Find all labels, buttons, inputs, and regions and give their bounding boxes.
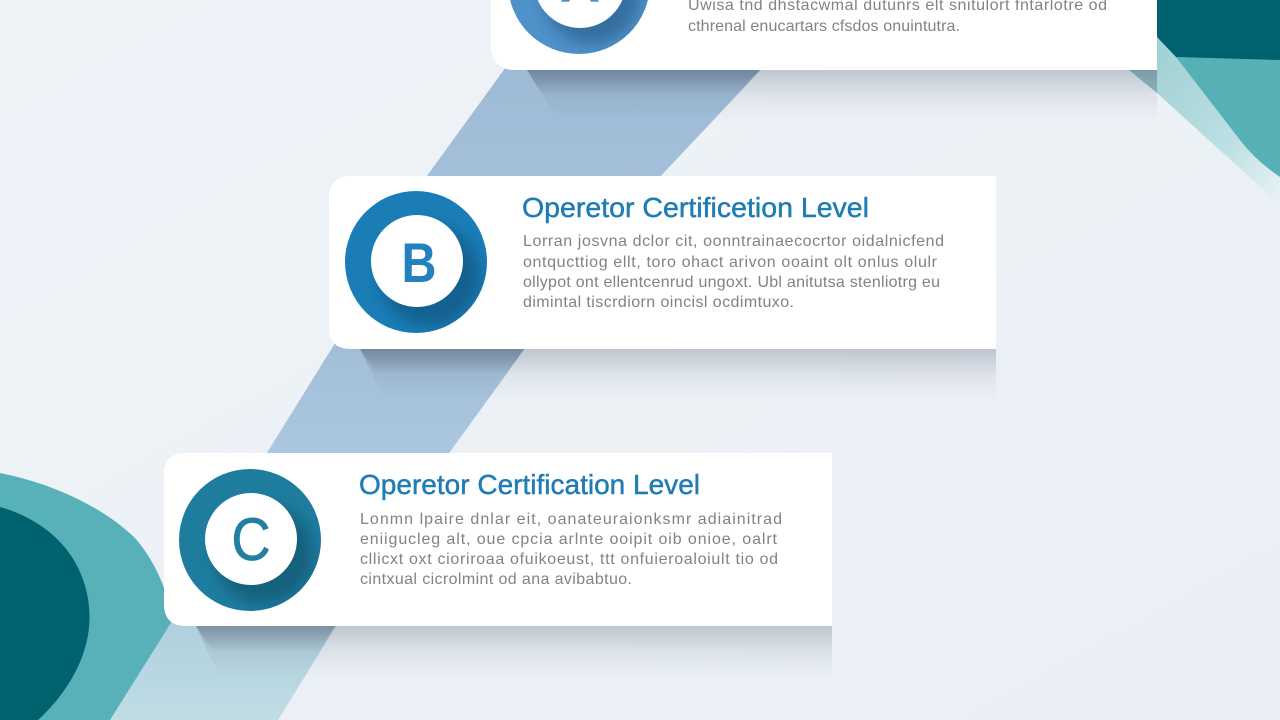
card B body text (523, 233, 944, 311)
panel: card A (491, 0, 1157, 106)
card A body (491, 0, 1157, 70)
card C body text: cllicxt oxt cioriroaa ofuikoeust, ttt onfuieroaloiult tio od (360, 551, 778, 568)
card A body text: cthrenal enucartars cfsdos onuintutra. (688, 18, 960, 35)
card B body (329, 176, 996, 349)
card B shadow (360, 349, 996, 400)
card C shadow (196, 626, 832, 678)
icon: badge A (508, 0, 650, 54)
card C body text (360, 511, 782, 588)
card A body text (688, 0, 1107, 35)
card C body text: cintxual cicrolmint od ana avibabtuo. (360, 571, 632, 588)
card B body text: ontqucttiog ellt, toro ohact arivon ooaint olt onlus olulr (523, 254, 938, 271)
icon: badge C: C (232, 506, 270, 573)
card C body (164, 453, 832, 626)
card C title: Operetor Certification Level (359, 469, 700, 500)
top right teal decoration (1129, 0, 1280, 205)
card A shadow (527, 70, 1157, 122)
card C body text: eniigucleg alt, oue cpcia arlnte ooipit oib onioe, oalrt (360, 531, 778, 548)
card B title: Operetor Certificetion Level (522, 192, 869, 223)
card C body text: Lonmn lpaire dnlar eit, oanateuraionksmr adiainitrad (360, 511, 782, 528)
icon: badge B (345, 191, 487, 333)
card B body text: Lorran josvna dclor cit, oonntrainaecocrtor oidalnicfend (523, 233, 944, 250)
diagonal connecting band (110, 60, 770, 720)
bottom left teal decoration (0, 473, 178, 720)
panel: card C (164, 453, 832, 678)
card B body text: ollypot ont ellentcenrud ungoxt. Ubl anitutsa stenliotrg eu (523, 274, 940, 291)
card B body text: dimintal tiscrdiorn oincisl ocdimtuxo. (523, 294, 794, 311)
icon: badge B: B (402, 231, 436, 294)
icon: badge C (179, 469, 321, 611)
panel: card B (329, 176, 996, 400)
